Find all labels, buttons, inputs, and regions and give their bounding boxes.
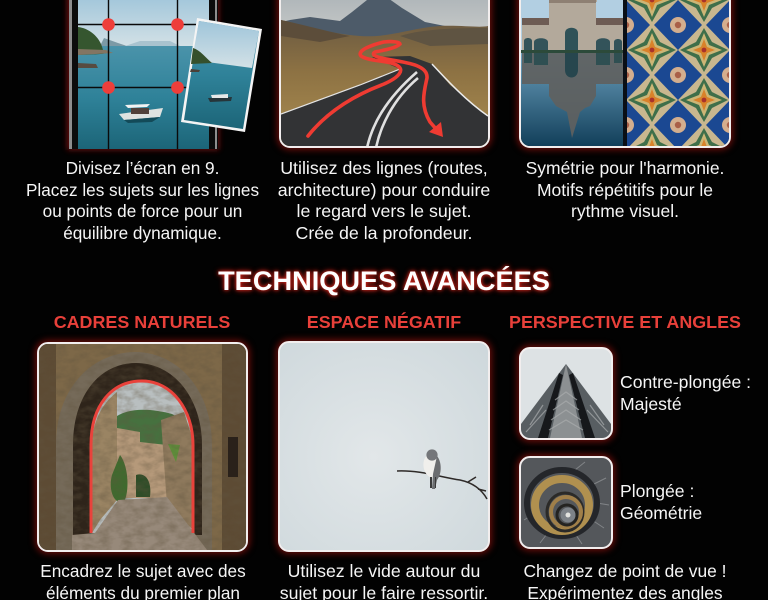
text: rule of thirds: Divisez l’écran en 9. <box>66 158 219 178</box>
road surface <box>281 56 488 150</box>
icon: boat <box>119 104 163 123</box>
dark soffit <box>73 363 202 535</box>
text: negative space <box>280 561 488 600</box>
panel: natural frame photo <box>37 342 248 552</box>
branch <box>397 471 487 499</box>
text: plongee: Géométrie <box>620 502 702 522</box>
text: leading lines <box>278 158 490 243</box>
panel: rule of thirds phone <box>63 0 262 154</box>
panel: low angle photo <box>519 347 613 440</box>
icon: bird <box>422 449 442 489</box>
building <box>522 0 624 50</box>
text: change viewpoint <box>523 561 727 600</box>
red arrow <box>308 42 443 137</box>
text: symmetry <box>526 158 724 221</box>
text: contre-plongee <box>620 372 751 414</box>
text: contre-plongee: Contre-plongée : <box>620 372 751 392</box>
panel: leading lines photo <box>279 0 490 148</box>
text: negative space: Utilisez le vide autour du <box>288 561 480 581</box>
text: leading lines: le regard vers le sujet. <box>297 201 471 221</box>
small photo <box>181 18 262 132</box>
power points <box>102 18 184 94</box>
title: techniques avancees: TECHNIQUES AVANCÉES <box>218 265 550 296</box>
text: leading lines: architecture) pour conduire <box>278 180 490 200</box>
text: rule of thirds: Placez les sujets sur les lignes <box>26 180 259 200</box>
cobbled ground <box>72 497 207 550</box>
text: plongee <box>620 481 702 522</box>
text: plongee: Plongée : <box>620 481 694 501</box>
view through the arch <box>91 381 193 533</box>
heading: espace negatif: ESPACE NÉGATIF <box>307 312 461 332</box>
heading: cadres naturels: CADRES NATURELS <box>54 312 230 332</box>
text: symmetry: Symétrie pour l'harmonie. <box>526 158 724 178</box>
text: change viewpoint: Changez de point de vue ! <box>523 561 727 581</box>
panel: symmetry and patterns photo <box>519 0 731 148</box>
text: rule of thirds: équilibre dynamique. <box>63 223 222 243</box>
red frame line <box>91 381 193 533</box>
text: symmetry: Motifs répétitifs pour le <box>537 180 713 200</box>
text: contre-plongee: Majesté <box>620 394 682 414</box>
text: leading lines: Utilisez des lignes (routes, <box>280 158 488 178</box>
heading: perspective et angles: PERSPECTIVE ET ANGLES <box>509 312 741 332</box>
text: symmetry: rythme visuel. <box>571 201 679 221</box>
panel: high angle photo <box>519 456 613 549</box>
grid lines <box>78 0 209 149</box>
stone arch ring <box>56 352 212 550</box>
text: leading lines: Crée de la profondeur. <box>296 223 472 243</box>
text: rule of thirds: ou points de force pour un <box>43 201 242 221</box>
text: natural frames <box>40 561 246 600</box>
panel: negative space photo <box>278 341 490 552</box>
text: rule of thirds <box>26 158 259 243</box>
text: natural frames: Encadrez le sujet avec des <box>40 561 246 581</box>
reflection <box>522 53 624 138</box>
